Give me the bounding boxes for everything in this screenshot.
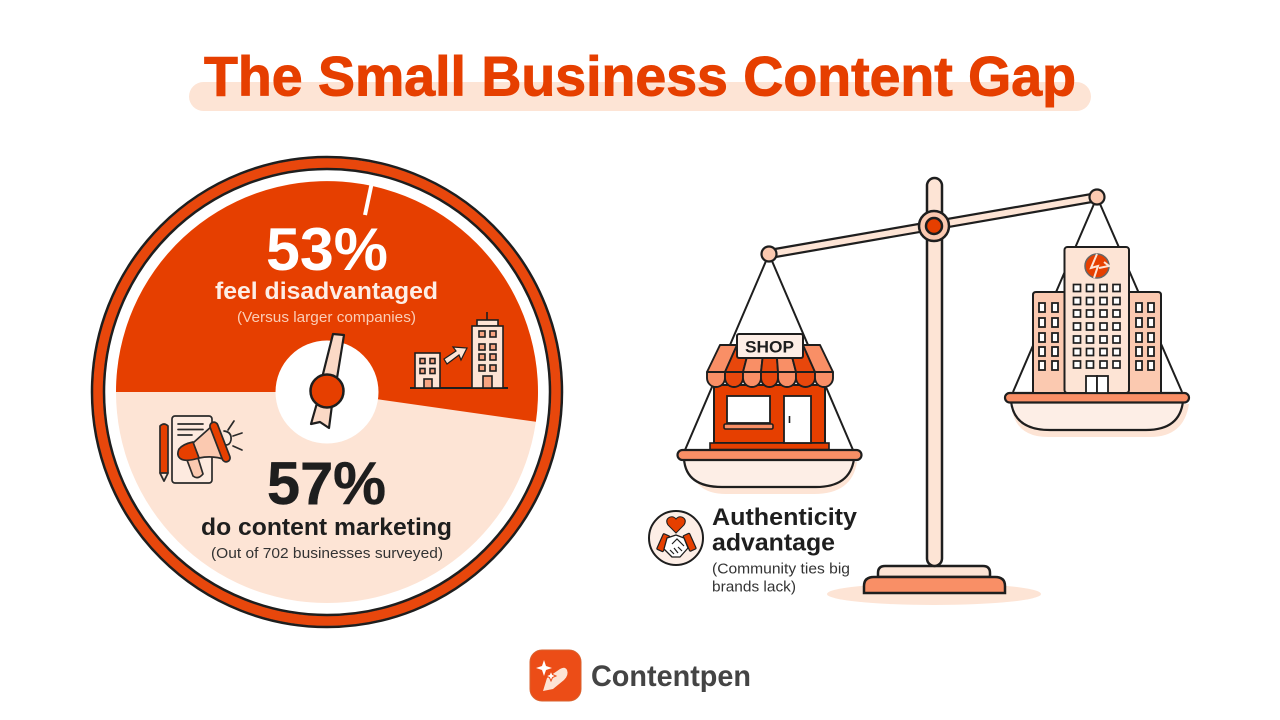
callout: authenticity advantage bbox=[649, 504, 858, 596]
shop walls bbox=[714, 385, 825, 443]
tower logo bbox=[1085, 254, 1109, 278]
53% stat bbox=[215, 216, 438, 326]
left pivot bbox=[762, 246, 776, 262]
tower windows bbox=[1074, 284, 1120, 368]
icon: document, pencil and megaphone bbox=[160, 416, 242, 483]
left pan with shop bbox=[678, 246, 862, 494]
centre hub bbox=[276, 340, 378, 444]
shop sign: SHOP bbox=[745, 338, 794, 356]
57% stat: 57% bbox=[267, 450, 386, 517]
side windows bbox=[1039, 303, 1154, 370]
shop door bbox=[784, 396, 811, 443]
right pan with corporate building bbox=[1005, 190, 1189, 437]
57% stat: (Out of 702 businesses surveyed) bbox=[211, 546, 443, 562]
central tower bbox=[1064, 247, 1129, 393]
dark segment: disadvantaged bbox=[116, 181, 538, 422]
right pivot bbox=[1090, 190, 1104, 204]
brand logo bbox=[530, 650, 751, 701]
brand logo: Contentpen bbox=[591, 660, 751, 693]
scale beam bbox=[769, 193, 1098, 258]
callout text: Authenticity bbox=[712, 504, 858, 531]
shop awning bbox=[707, 345, 833, 387]
outer ring bbox=[98, 163, 556, 621]
icon: small and large building bbox=[410, 312, 508, 388]
needle bbox=[310, 334, 344, 428]
shop sign bbox=[737, 334, 803, 358]
53% stat: 53% bbox=[266, 216, 388, 283]
pan bowl bbox=[690, 462, 857, 494]
pan bowl bbox=[1011, 404, 1189, 437]
icon: pen with sparkles bbox=[530, 650, 581, 701]
pan strings bbox=[1013, 197, 1182, 392]
53% stat: feel disadvantaged bbox=[215, 278, 438, 305]
tower door bbox=[1086, 376, 1108, 393]
panel: pie gauge bbox=[92, 157, 562, 627]
shop window bbox=[727, 396, 770, 423]
title: The Small Business Content Gap bbox=[204, 44, 1076, 108]
scale post bbox=[927, 178, 942, 566]
icon: handshake and heart bbox=[649, 511, 703, 565]
57% stat: do content marketing bbox=[201, 514, 452, 541]
panel: balance scale bbox=[678, 178, 1189, 605]
segment tick bbox=[365, 182, 372, 215]
callout text bbox=[712, 504, 858, 596]
callout text: brands lack) bbox=[712, 580, 796, 596]
53% stat: (Versus larger companies) bbox=[237, 310, 416, 326]
callout text: (Community ties big bbox=[712, 562, 850, 578]
side wings bbox=[1033, 292, 1161, 393]
pan strings bbox=[685, 254, 853, 450]
callout text: advantage bbox=[712, 530, 835, 556]
57% stat bbox=[201, 450, 452, 562]
beam pivot bbox=[919, 211, 949, 241]
scale base bbox=[827, 566, 1041, 605]
light segment: content marketing bbox=[116, 181, 538, 603]
